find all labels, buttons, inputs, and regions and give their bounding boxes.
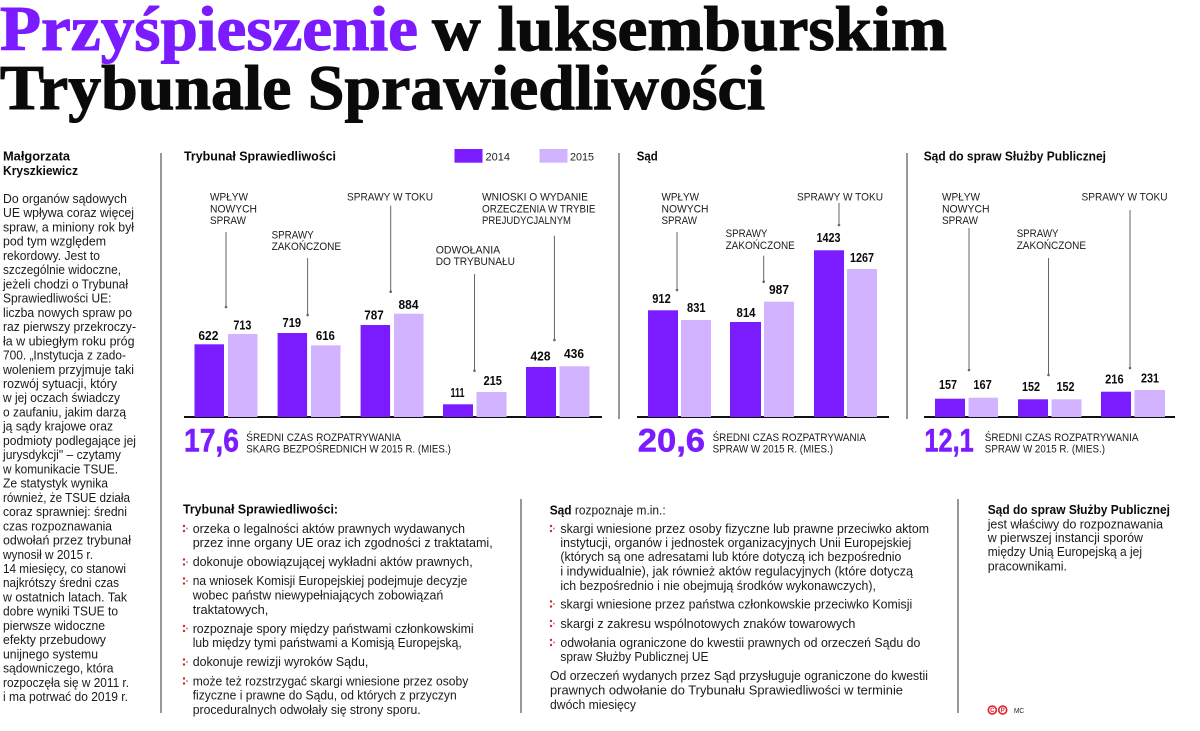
bullet list: fizyczne i prawne do Sądu, od których z przyczyn bbox=[193, 688, 457, 702]
bullet list: rozpoznaje spory między państwami członkowskimi bbox=[193, 621, 474, 636]
bar values: 713 bbox=[233, 318, 251, 332]
label: wpływ nowych spraw: NOWYCH bbox=[662, 203, 709, 215]
bar values: 157 bbox=[939, 378, 957, 392]
label: wpływ nowych spraw bbox=[662, 192, 709, 227]
bullet list: traktatowych, bbox=[193, 602, 268, 617]
commentary text: pod tym względem bbox=[3, 234, 106, 249]
credits: logo and initials bbox=[988, 706, 1024, 715]
bullet list: przez inne organy UE oraz ich zgodności z traktatami, bbox=[193, 535, 493, 550]
commentary text: 700. „Instytucja z zado- bbox=[3, 348, 126, 362]
bullet list: i indywidualnie), jak również aktów regulacyjnych (które dotyczą bbox=[560, 564, 914, 578]
bar values bbox=[939, 372, 1159, 394]
label: wpływ nowych spraw: SPRAW bbox=[210, 215, 247, 227]
description text: w pierwszej instancji sporów bbox=[987, 530, 1144, 545]
arrow: sprawy w toku bbox=[1129, 210, 1131, 369]
commentary text: coraz sprawniej: średni bbox=[3, 504, 127, 519]
label: wpływ nowych spraw: WPŁYW bbox=[210, 192, 249, 204]
key figure caption: SPRAW W 2015 R. (MIES.) bbox=[985, 444, 1105, 456]
heading: Trybunał Sprawiedliwości bbox=[184, 148, 336, 164]
label: wpływ nowych spraw: WPŁYW bbox=[662, 192, 700, 204]
label: wnioski o wydanie orzeczenia bbox=[482, 192, 596, 227]
bullet list: skargi wniesione przez państwa członkowskie przeciwko Komisji bbox=[560, 596, 912, 612]
label: sprawy zakończone: SPRAWY bbox=[1017, 228, 1059, 240]
arrow: wnioski o wydanie orzeczenia bbox=[553, 236, 556, 341]
commentary text: w ostatnich latach. Tak bbox=[2, 589, 127, 604]
bullet list: proceduralnych odwołały się strony sporu. bbox=[193, 702, 421, 717]
label: sprawy w toku: SPRAWY W TOKU bbox=[1082, 192, 1168, 204]
key figure caption bbox=[246, 431, 451, 456]
closing note: Od orzeczeń wydanych przez Sąd przysługuje ograniczone do kwestii bbox=[550, 668, 928, 683]
heading: Sąd do spraw Służby Publicznej bbox=[988, 502, 1170, 517]
arrow: sprawy zakończone bbox=[762, 256, 765, 283]
bullet list bbox=[550, 521, 929, 664]
commentary text: 14 miesięcy, co stanowi bbox=[3, 561, 126, 576]
credits: logo and initials: MC bbox=[1014, 708, 1024, 715]
label: wpływ nowych spraw: NOWYCH bbox=[210, 203, 257, 215]
label: odwołania do trybunału bbox=[436, 244, 515, 268]
label: sprawy zakończone bbox=[272, 229, 341, 253]
commentary text: Ze statystyk wynika bbox=[3, 476, 109, 491]
bullet list: odwołania ograniczone do kwestii prawnych od orzeczeń Sądu do bbox=[560, 635, 920, 650]
closing note: dwóch miesięcy bbox=[550, 697, 636, 712]
bullet list: może też rozstrzygać skargi wniesione przez osoby bbox=[193, 674, 469, 688]
credits: logo and initials: C bbox=[990, 708, 995, 714]
label: wpływ nowych spraw: NOWYCH bbox=[942, 203, 990, 215]
key figure caption: ŚREDNI CZAS ROZPATRYWANIA bbox=[985, 431, 1139, 444]
bullet list: wobec państw niewypełniających zobowiązań bbox=[192, 588, 443, 602]
bullet list: skargi z zakresu wspólnotowych znaków towarowych bbox=[560, 616, 855, 631]
key figure: 20,6: 20,6 bbox=[638, 423, 705, 459]
bar values: 622 bbox=[198, 329, 218, 343]
bar values: 616 bbox=[316, 329, 335, 343]
bullet list: spraw Służby Publicznej UE bbox=[560, 649, 709, 664]
description text: pracownikami. bbox=[988, 558, 1067, 574]
commentary text: UE wpływa coraz więcej bbox=[3, 205, 134, 220]
bar values: 987 bbox=[769, 283, 789, 297]
commentary text: ła w ubiegłym roku próg bbox=[3, 333, 134, 348]
heading: Sąd bbox=[637, 148, 658, 164]
arrow: sprawy w toku bbox=[389, 206, 392, 293]
label: sprawy zakończone: SPRAWY bbox=[726, 228, 768, 240]
commentary text: pierwsze widoczne bbox=[3, 618, 105, 633]
bar values: 787 bbox=[364, 308, 384, 322]
label: sprawy zakończone: ZAKOŃCZONE bbox=[272, 240, 341, 253]
panel: Sąd do spraw Służby Publicznej description bbox=[987, 502, 1170, 574]
bullet list: dokonuje obowiązującej wykładni aktów prawnych, bbox=[193, 554, 473, 569]
legend bbox=[454, 149, 594, 164]
arrow: wpływ nowych spraw bbox=[225, 232, 227, 308]
author name: Małgorzata bbox=[3, 148, 71, 164]
commentary text: jurysdykcji" – czytamy bbox=[2, 447, 121, 462]
commentary text: czas rozpoznawania bbox=[3, 518, 113, 533]
key figure caption: ŚREDNI CZAS ROZPATRYWANIA bbox=[246, 431, 402, 444]
label: sprawy w toku: SPRAWY W TOKU bbox=[797, 192, 883, 204]
description text: jest właściwy do rozpoznawania bbox=[987, 516, 1164, 532]
legend: 2014 bbox=[486, 152, 510, 164]
bar chart bbox=[184, 314, 602, 417]
commentary text: dobre wyniki TSUE to bbox=[3, 604, 118, 619]
panel: Trybunał Sprawiedliwości chart bbox=[184, 148, 602, 459]
label: wpływ nowych spraw bbox=[210, 192, 257, 227]
bar values: 719 bbox=[283, 316, 301, 330]
commentary text: sądowniczego, która bbox=[3, 661, 114, 676]
label: wpływ nowych spraw: SPRAW bbox=[662, 215, 698, 227]
commentary text bbox=[2, 191, 136, 704]
label: sprawy w toku: SPRAWY W TOKU bbox=[347, 192, 433, 204]
bar values: 912 bbox=[652, 292, 671, 306]
arrow: sprawy w toku bbox=[838, 203, 840, 226]
label: odwołania do trybunału: ODWOŁANIA bbox=[436, 244, 501, 256]
commentary text: raz pierwszy przekroczy- bbox=[3, 319, 136, 334]
panel: Sąd do spraw Służby Publicznej chart bbox=[924, 148, 1175, 459]
bullet list: dokonuje rewizji wyroków Sądu, bbox=[193, 654, 368, 669]
commentary text: spraw, a miniony rok był bbox=[3, 220, 134, 234]
label: odwołania do trybunału: DO TRYBUNAŁU bbox=[436, 256, 515, 268]
description text bbox=[987, 516, 1164, 574]
bullet list: ich bezpośrednio i nie obejmują środków wykonawczych), bbox=[560, 578, 876, 593]
commentary text: rekordowy. Jest to bbox=[3, 248, 100, 263]
credits: logo and initials: P bbox=[1001, 708, 1005, 714]
bar values bbox=[198, 298, 584, 400]
key figure: 12,1: 12,1 bbox=[924, 423, 974, 459]
bullet list: instytucji, organów i jednostek organizacyjnych Unii Europejskiej bbox=[560, 535, 911, 550]
commentary text: rozpoczęła się w 2011 r. bbox=[3, 675, 129, 690]
bar chart bbox=[924, 390, 1175, 417]
commentary text: ją sądy krajowe oraz bbox=[2, 419, 113, 434]
closing note bbox=[550, 668, 928, 712]
bar values: 167 bbox=[973, 378, 992, 392]
key figure caption: ŚREDNI CZAS ROZPATRYWANIA bbox=[713, 431, 867, 444]
key figure caption bbox=[985, 431, 1139, 456]
commentary text: i ma potrwać do 2019 r. bbox=[3, 689, 128, 704]
heading: Sąd rozpoznaje m.in.: bbox=[550, 502, 666, 518]
commentary text: w komunikacie TSUE. bbox=[2, 461, 118, 476]
bar values: 436 bbox=[564, 347, 584, 361]
label: sprawy zakończone: ZAKOŃCZONE bbox=[726, 239, 795, 252]
label: wnioski o wydanie orzeczenia: PREJUDYCJALNYM bbox=[482, 215, 571, 227]
commentary text: rozwój sytuacji, który bbox=[3, 376, 117, 391]
label: wpływ nowych spraw: SPRAW bbox=[942, 215, 979, 227]
commentary text: liczba nowych spraw po bbox=[3, 305, 132, 320]
commentary text: jeżeli chodzi o Trybunał bbox=[2, 276, 128, 291]
heading: Sąd do spraw Służby Publicznej bbox=[924, 148, 1106, 164]
arrow: sprawy zakończone bbox=[1047, 258, 1050, 376]
commentary text: efekty przebudowy bbox=[3, 632, 106, 647]
bullet list: na wniosek Komisji Europejskiej podejmuje decyzje bbox=[193, 573, 467, 588]
bullet list: orzeka o legalności aktów prawnych wydawanych bbox=[193, 521, 465, 536]
bullet list: (których są one adresatami lub które dotyczą ich bezpośrednio bbox=[560, 549, 901, 564]
author name bbox=[3, 148, 78, 178]
bullet list bbox=[183, 521, 493, 717]
bar values: 428 bbox=[530, 350, 551, 364]
bar values: 231 bbox=[1141, 372, 1159, 386]
commentary text: unijnego systemu bbox=[3, 646, 98, 661]
bar values: 884 bbox=[398, 298, 419, 312]
panel: author commentary column bbox=[2, 148, 136, 704]
legend: 2015 bbox=[570, 152, 594, 164]
bar chart bbox=[637, 250, 889, 417]
key figure caption: SKARG BEZPOŚREDNICH W 2015 R. (MIES.) bbox=[246, 442, 451, 456]
commentary text: najkrótszy średni czas bbox=[3, 575, 119, 590]
bar values: 831 bbox=[687, 301, 706, 315]
title: Trybunale Sprawiedliwości bbox=[0, 52, 765, 123]
panel: Trybunał Sprawiedliwości competences bbox=[183, 502, 493, 717]
commentary text: wynosił w 2015 r. bbox=[2, 547, 93, 562]
author name: Kryszkiewicz bbox=[3, 163, 78, 178]
arrow: wpływ nowych spraw bbox=[676, 232, 678, 291]
title bbox=[0, 0, 947, 123]
heading: Trybunał Sprawiedliwości: bbox=[183, 502, 338, 516]
commentary text: o zaufaniu, jakim darzą bbox=[3, 404, 127, 420]
bar values: 814 bbox=[736, 306, 756, 320]
key figure: 17,6: 17,6 bbox=[184, 423, 239, 459]
bullet list: skargi wniesione przez osoby fizyczne lub prawne przeciwko aktom bbox=[560, 521, 929, 536]
label: wpływ nowych spraw bbox=[942, 192, 990, 227]
bar values: 111 bbox=[450, 386, 465, 400]
commentary text: Sprawiedliwości UE: bbox=[3, 291, 112, 306]
commentary text: woleniem przyjmuje taki bbox=[2, 362, 134, 377]
bar values: 152 bbox=[1022, 380, 1040, 394]
closing note: prawnych odwołanie do Trybunału Sprawiedliwości w terminie bbox=[550, 682, 903, 698]
arrow: odwołania do trybunału bbox=[473, 274, 476, 372]
arrow: sprawy zakończone bbox=[306, 258, 309, 316]
commentary text: Do organów sądowych bbox=[3, 191, 127, 206]
bar values bbox=[652, 231, 874, 320]
panel: Sąd chart bbox=[637, 148, 889, 459]
bar values: 152 bbox=[1056, 380, 1075, 394]
panel: Sąd competences bbox=[550, 502, 929, 712]
commentary text: podmioty podlegające jej bbox=[3, 433, 136, 448]
commentary text: również, że TSUE działa bbox=[3, 490, 131, 505]
description text: między Unią Europejską a jej bbox=[988, 544, 1142, 559]
key figure caption bbox=[713, 431, 867, 456]
label: wpływ nowych spraw: WPŁYW bbox=[942, 192, 981, 204]
bar values: 216 bbox=[1105, 372, 1124, 386]
bullet list: lub między tymi państwami a Komisją Europejską, bbox=[193, 635, 462, 650]
bar values: 1267 bbox=[850, 251, 874, 265]
label: wnioski o wydanie orzeczenia: ORZECZENIA W TRYBIE bbox=[482, 203, 596, 215]
bar values: 215 bbox=[483, 374, 502, 388]
bar values: 1423 bbox=[816, 231, 841, 245]
label: sprawy zakończone bbox=[1017, 228, 1086, 252]
arrow: wpływ nowych spraw bbox=[968, 228, 970, 371]
commentary text: w jej oczach świadczy bbox=[2, 390, 120, 405]
label: sprawy zakończone: ZAKOŃCZONE bbox=[1017, 239, 1086, 252]
commentary text: szczególnie widoczne, bbox=[3, 262, 121, 277]
key figure caption: SPRAW W 2015 R. (MIES.) bbox=[713, 444, 833, 456]
label: wnioski o wydanie orzeczenia: WNIOSKI O WYDANIE bbox=[482, 192, 588, 204]
label: sprawy zakończone: SPRAWY bbox=[272, 229, 314, 241]
commentary text: odwołań przez trybunał bbox=[3, 532, 131, 548]
label: sprawy zakończone bbox=[726, 228, 795, 252]
